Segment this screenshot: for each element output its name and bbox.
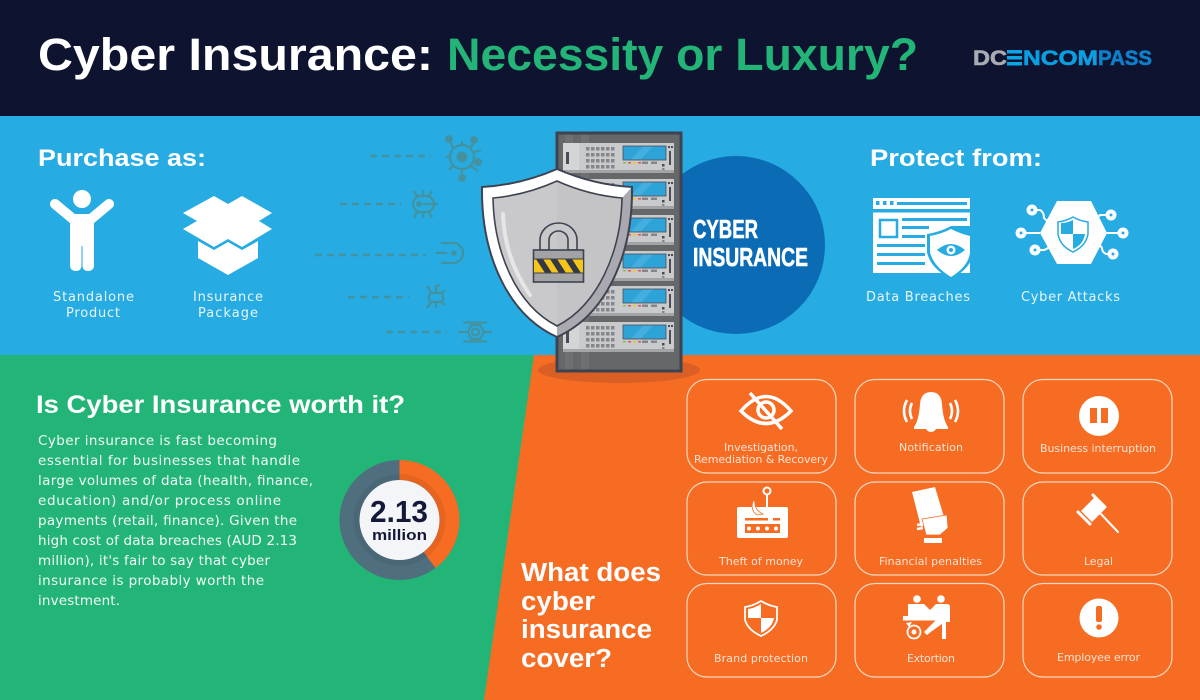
circle badge: cyber insurance: INSURANCE [693,242,808,272]
card: notification [855,380,1004,473]
card: brand protection [687,584,836,677]
paragraph: million), it's fair to say that cyber [38,553,270,569]
threat dashes [315,156,447,332]
logo: DC Encompass [973,47,1152,70]
heading: what does cyber insurance cover: cyber [521,588,595,616]
paragraph: large volumes of data (health, finance, [38,473,313,489]
title: Cyber Insurance: [38,29,433,80]
logo: DC Encompass: DC [973,47,1007,70]
heading: purchase as: Purchase as: [38,145,206,172]
card: legal: Legal [1084,555,1113,568]
card: extortion [855,584,1004,677]
icon: person [55,190,109,271]
circle badge: cyber insurance [647,156,825,334]
paragraph: Cyber insurance is fast becoming [38,433,277,449]
label: standalone product [53,290,134,321]
card: employee error [1023,584,1172,677]
card: legal [1023,482,1172,575]
card: theft of money: Theft of money [718,555,803,568]
icon: pause [1079,396,1119,436]
background: orange panel [484,355,1200,700]
background: blue band [0,116,1200,355]
heading: what does cyber insurance cover: What does [521,559,661,587]
paragraph [38,433,313,609]
icon: gavel [1078,495,1118,532]
card: theft of money [687,482,836,575]
paragraph: payments (retail, finance). Given the [38,513,297,529]
icon: virus [446,136,481,181]
title: Necessity or Luxury? [447,29,918,80]
padlock [533,223,584,282]
label: cyber attacks: Cyber Attacks [1021,290,1120,305]
heading: protect from: Protect from: [870,145,1042,172]
card: financial penalties: Financial penalties [879,555,982,568]
heading: what does cyber insurance cover: insurance [521,616,652,644]
icon: exclamation [1080,598,1118,638]
card: business interruption: Business interruption [1040,442,1156,455]
icon: open box [183,196,272,275]
icon: bug [413,190,438,218]
logo: DC Encompass: PASS [1098,47,1152,70]
card: investigation, remediation and recovery: Investigation, [724,441,798,454]
card: employee error: Employee error [1057,651,1140,664]
label: insurance package: Insurance [193,290,263,305]
label: standalone product: Product [66,306,120,321]
icon: crossed eye [741,393,791,429]
paragraph: essential for businesses that handle [38,453,300,469]
icon: phishing card [737,488,788,538]
heading: what does cyber insurance cover: cover? [521,645,612,673]
paragraph: education) and/or process online [38,493,281,509]
background: header band [0,0,1200,116]
icon: cyber attacks hexagon [1016,201,1128,264]
icon: extortion figures [903,595,950,639]
card: notification: Notification [899,441,963,454]
icon: beetle [426,285,445,308]
icon: hand holding card [912,487,948,543]
label: insurance package: Package [198,306,258,321]
card: investigation, remediation and recovery: Remediation & Recovery [694,453,828,466]
label: insurance package [193,290,263,321]
logo: DC Encompass: NCOM [1023,47,1098,70]
title [38,29,918,80]
label: standalone product: Standalone [53,290,134,305]
shield with padlock [482,169,632,337]
icon: shield [745,601,777,636]
background: green panel [0,355,600,700]
card: investigation, remediation and recovery [687,380,836,473]
icon: bell [904,392,958,432]
paragraph: high cost of data breaches (AUD 2.13 [38,533,297,549]
server rack [557,133,681,371]
card: business interruption [1023,380,1172,473]
card: financial penalties [855,482,1004,575]
donut chart: 2.13 million [340,460,460,580]
heading: what does cyber insurance cover [521,559,661,673]
icon: hexagon node [458,322,492,342]
icon: target [436,243,463,263]
heading: is cyber insurance worth it: Is Cyber Insurance worth it? [36,391,405,419]
card: brand protection: Brand protection [714,652,808,665]
donut chart: 2.13 million: 2.13 [370,494,428,529]
circle badge: cyber insurance: CYBER [693,214,758,244]
paragraph: insurance is probably worth the [38,573,264,589]
donut chart: 2.13 million: million [372,527,427,544]
floor shadow [538,357,700,383]
paragraph: investment. [38,593,120,609]
label: data breaches: Data Breaches [866,290,970,305]
icon: data breaches window [873,198,973,279]
card: extortion: Extortion [907,652,955,665]
